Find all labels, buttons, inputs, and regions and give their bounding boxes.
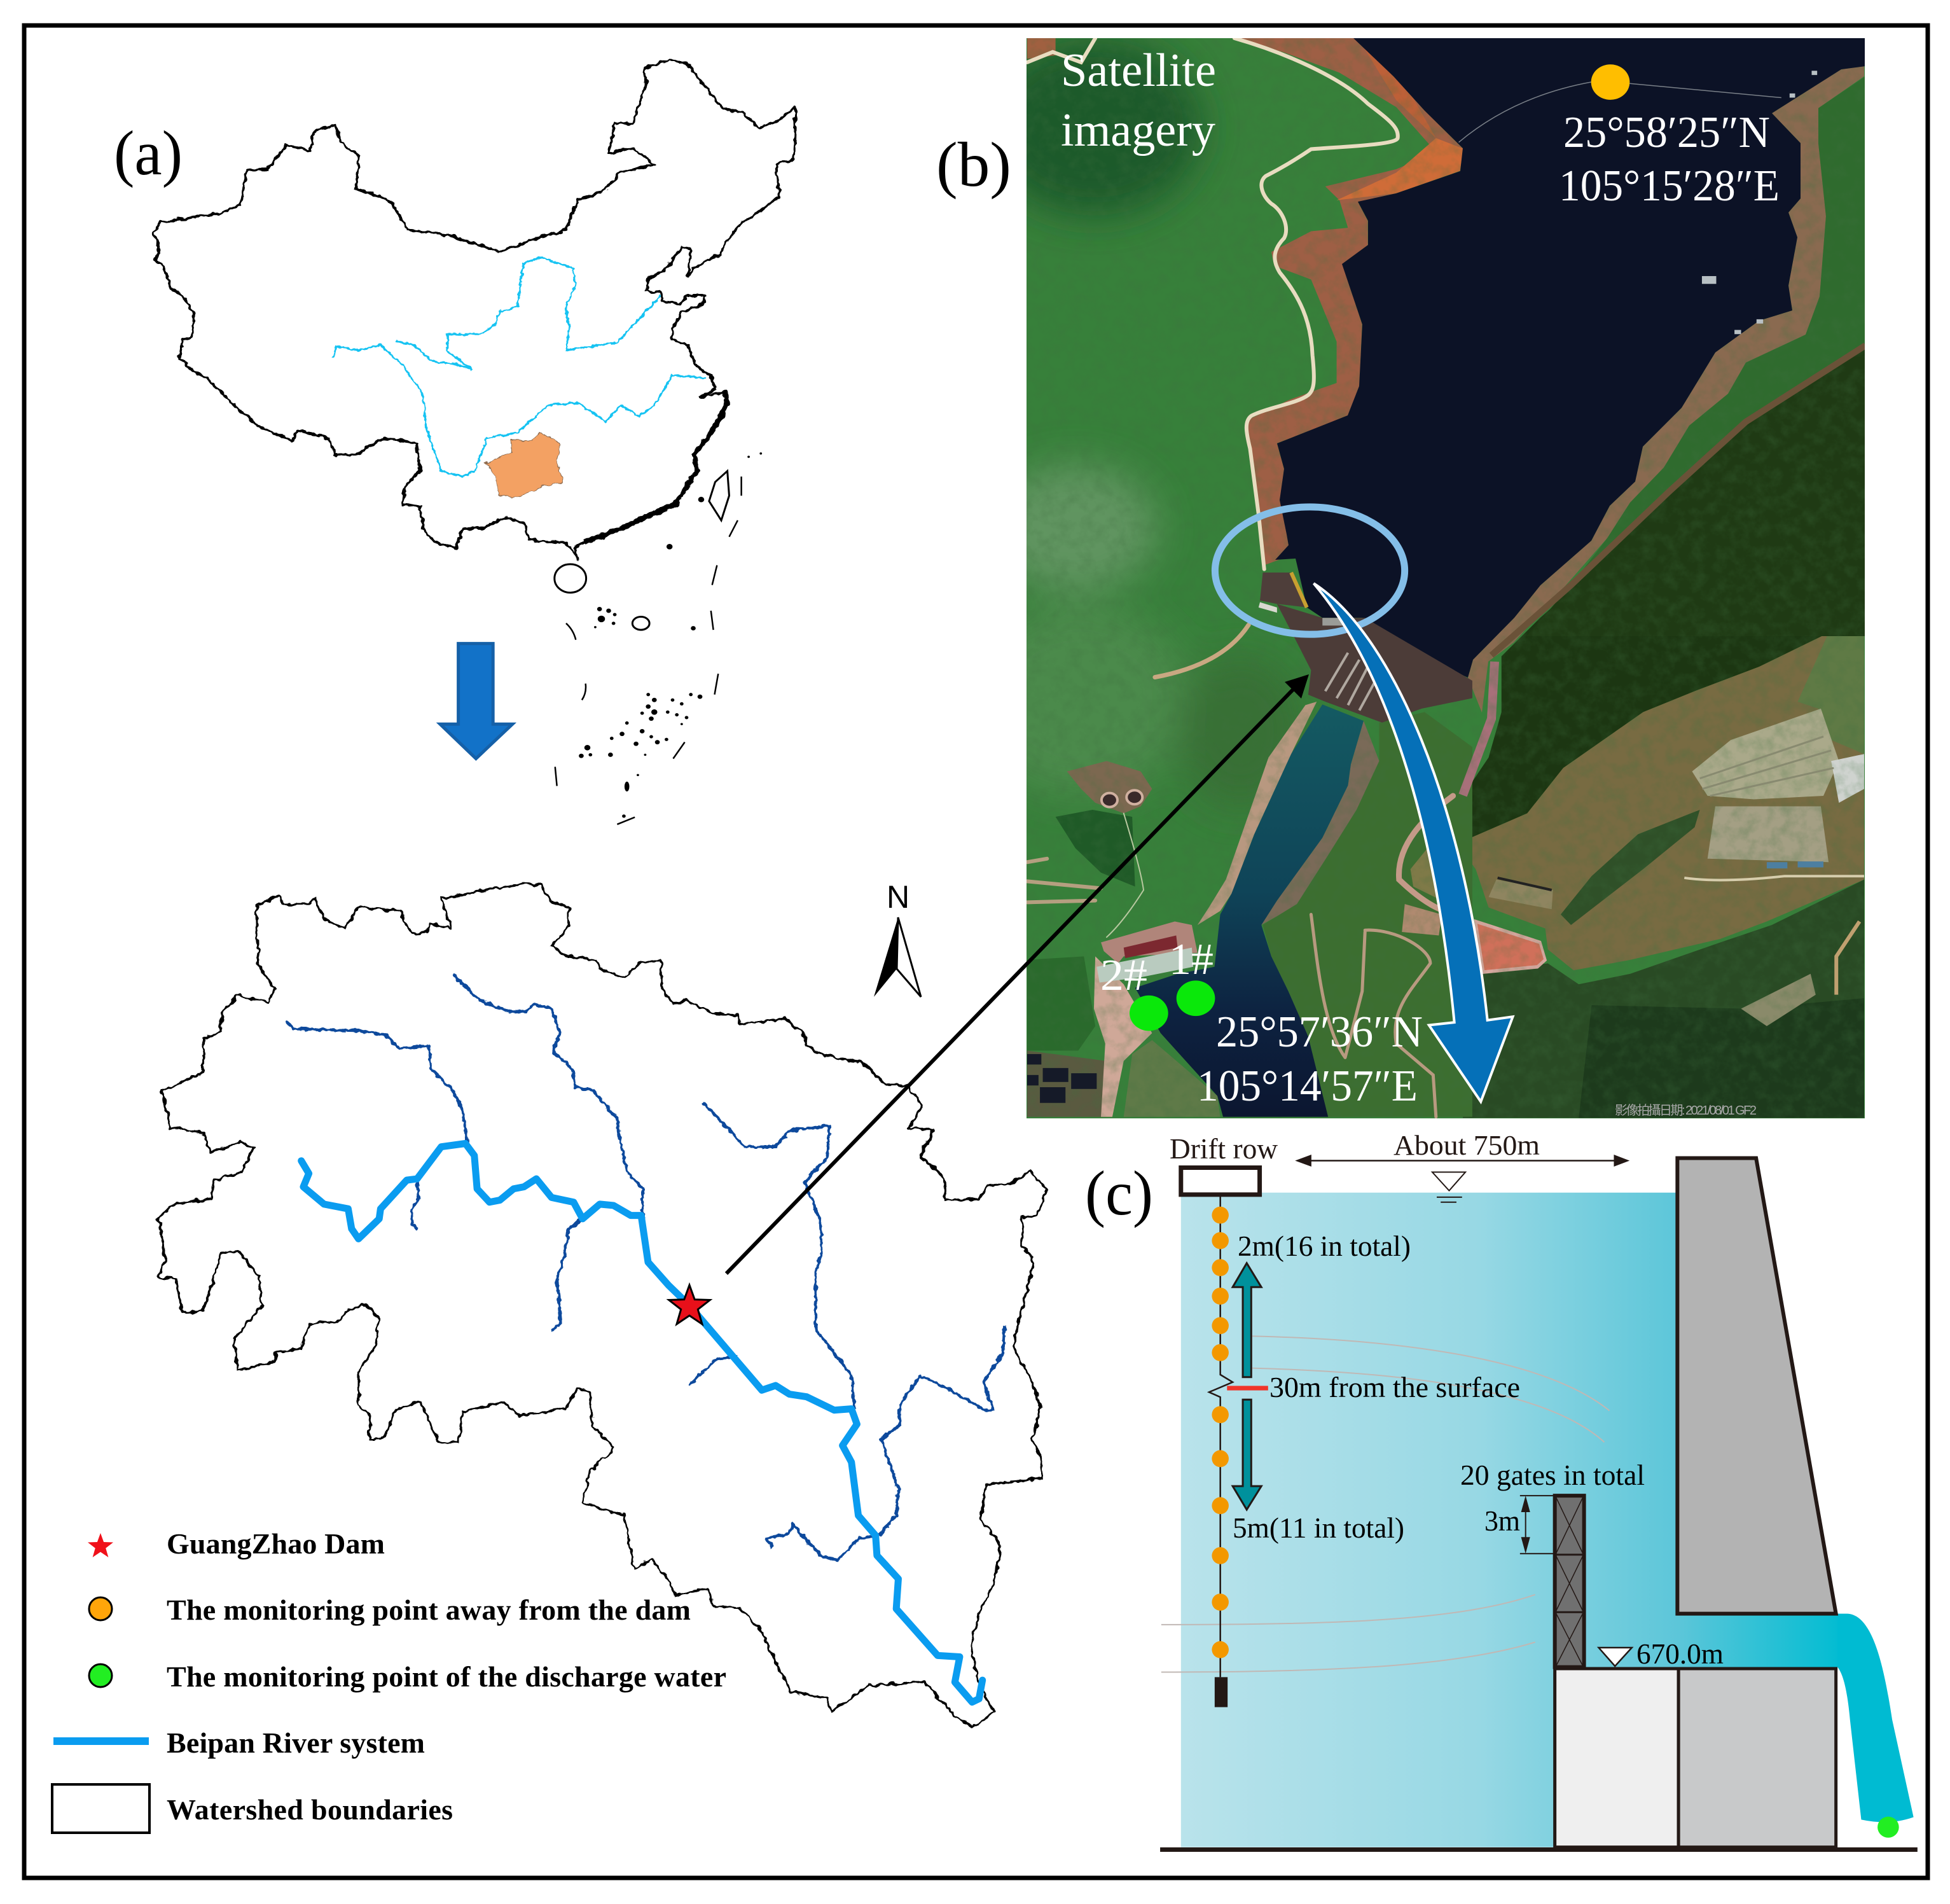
reservoir water — [1181, 1193, 1839, 1847]
side roads — [1027, 625, 1453, 1117]
upward spacing arrow — [1233, 1263, 1261, 1377]
middle terrain — [1027, 702, 1472, 1117]
east access road — [1836, 921, 1860, 995]
tan hillside — [1463, 618, 1864, 970]
water surface symbol — [1432, 1172, 1465, 1202]
powerhouse wall — [1101, 921, 1198, 963]
tank pad — [1067, 761, 1152, 813]
GuangZhao Dam star — [669, 1285, 710, 1324]
intake yard — [1260, 573, 1308, 608]
label (c): (c) — [1085, 1158, 1153, 1228]
thermal stratification lines — [1161, 1336, 1609, 1672]
3m dimension — [1520, 1496, 1555, 1553]
satellite labels: 25°57′36″N — [1216, 1008, 1423, 1057]
drift row float — [1181, 1167, 1260, 1195]
tank holes — [1102, 790, 1142, 807]
quarry lower pit — [1708, 806, 1829, 862]
shed shadow — [1498, 878, 1552, 890]
panel a: China map — [153, 59, 796, 824]
downstream river — [1135, 704, 1364, 1117]
legend: discharge monitoring point — [89, 1664, 112, 1687]
pink spoil area — [1476, 921, 1545, 972]
satellite labels: 1# — [1169, 935, 1214, 984]
darker lower forest — [1579, 998, 1864, 1118]
inner green field — [1411, 824, 1456, 908]
discharge monitoring point 1# — [1177, 980, 1215, 1016]
southeast forest — [1463, 880, 1864, 1118]
mooring weight — [1215, 1677, 1227, 1707]
satellite labels: Satellite — [1061, 45, 1216, 97]
tailwater level symbol — [1599, 1648, 1632, 1666]
intake base — [1555, 1669, 1678, 1847]
lake — [1275, 38, 1865, 678]
northwest corner bare ground — [1027, 38, 1056, 59]
dam highlight ellipse — [1215, 507, 1405, 634]
powerhouse red roof — [1124, 935, 1178, 958]
discharge monitoring point — [1877, 1817, 1899, 1838]
north arrow: N — [887, 879, 909, 915]
Yangtze River — [333, 345, 706, 476]
leader arrow from star to dam — [726, 674, 1309, 1274]
Guizhou province — [485, 431, 563, 497]
discharge monitoring point 2# — [1130, 996, 1168, 1031]
30m marker — [1227, 1386, 1268, 1391]
panel c text labels — [1170, 1130, 1724, 1670]
legend — [52, 1527, 726, 1833]
panel c text labels: 3m — [1484, 1505, 1520, 1537]
upper ridge — [1362, 45, 1436, 138]
pad — [1259, 602, 1277, 613]
orange headland — [1337, 138, 1463, 200]
boom line — [1459, 82, 1781, 142]
southeast terrain — [1463, 573, 1864, 1118]
pink east road — [1463, 662, 1495, 795]
legend: GuangZhao Dam — [167, 1527, 385, 1560]
spillway chutes — [1325, 653, 1380, 711]
dam crest — [1277, 604, 1472, 723]
powerhouse pale roof — [1096, 948, 1193, 982]
tonal patches on west slope — [1027, 38, 1303, 805]
hillside road — [1027, 38, 1398, 569]
legend: watershed — [52, 1784, 149, 1833]
satellite labels: 2# — [1100, 951, 1147, 1000]
north arrow — [874, 879, 921, 997]
panel a: Beipan River watershed map — [158, 884, 1047, 1727]
terraces — [1741, 974, 1816, 1026]
satellite labels: imagery — [1061, 104, 1215, 156]
legend: dam — [88, 1533, 113, 1557]
powerhouse yard — [1094, 956, 1152, 1117]
legend: Watershed boundaries — [167, 1793, 453, 1826]
east shore band — [1468, 66, 1864, 712]
blue sheds — [1767, 861, 1823, 868]
southeast coast — [584, 392, 728, 542]
east road — [1491, 345, 1865, 655]
dam and downstream features — [1027, 573, 1472, 1117]
ponds area — [1027, 1050, 1107, 1117]
small sheds — [1488, 880, 1553, 909]
satellite labels: 25°58′25″N — [1563, 108, 1770, 157]
monitoring point far from dam — [1591, 64, 1629, 100]
dam body — [1677, 1158, 1836, 1614]
panel c text labels: 2m(16 in total) — [1238, 1230, 1411, 1262]
pond cells — [1027, 1054, 1096, 1103]
tributaries — [286, 974, 1004, 1560]
west shore — [1027, 38, 1463, 566]
islands and maritime dashes — [555, 452, 762, 824]
legend: The monitoring point of the discharge water — [167, 1660, 726, 1693]
dark strip in hillside — [1561, 810, 1700, 925]
legend: far monitoring point — [89, 1597, 112, 1620]
gate tower — [1555, 1496, 1584, 1667]
quarry bench lines — [1700, 737, 1834, 796]
panel c text labels: 20 gates in total — [1460, 1459, 1645, 1491]
curved flow arrow — [1314, 583, 1513, 1102]
legend: river — [53, 1737, 149, 1745]
mooring line — [1209, 1195, 1233, 1677]
south green patch — [1124, 1040, 1220, 1117]
quarry road — [1684, 876, 1864, 880]
left forest — [1027, 956, 1095, 1050]
label (b): (b) — [936, 129, 1011, 200]
dark forest — [1472, 609, 1822, 837]
legend: The monitoring point away from the dam — [167, 1594, 691, 1626]
satellite labels — [1061, 45, 1780, 1111]
imagery date stamp: 影像拍攝日期: 2021/08/01 GF2 — [1615, 1103, 1757, 1118]
east river bank — [1261, 721, 1380, 925]
panel b: satellite imagery — [973, 38, 1865, 1118]
arrow: China to watershed — [440, 644, 513, 758]
panel c text labels: Drift row — [1170, 1133, 1278, 1165]
panel c text labels: 5m(11 in total) — [1233, 1512, 1404, 1544]
quarry details — [1498, 737, 1864, 995]
monitoring points on line — [1212, 1207, 1229, 1658]
white walkway — [1322, 618, 1348, 625]
satellite labels: 105°15′28″E — [1559, 162, 1780, 211]
ground line — [1160, 1847, 1918, 1852]
China outline — [153, 59, 796, 559]
east shore forest strip — [1571, 76, 1865, 585]
label (a): (a) — [114, 118, 183, 188]
gate gantry — [1291, 573, 1307, 608]
panel c text labels: 30m from the surface — [1269, 1372, 1520, 1403]
boats — [1702, 71, 1817, 334]
vegetation texture — [1027, 38, 1865, 1118]
powerhouse base — [1678, 1669, 1836, 1847]
downward spacing arrow — [1233, 1400, 1261, 1510]
panel c text labels: About 750m — [1393, 1130, 1540, 1161]
woodland — [1056, 810, 1135, 887]
Yellow River — [396, 258, 660, 370]
satellite labels: 105°14′57″E — [1197, 1062, 1418, 1111]
discharge jet — [1837, 1614, 1914, 1822]
legend: Beipan River system — [167, 1727, 425, 1759]
watershed boundary — [158, 884, 1047, 1727]
panel c text labels: 670.0m — [1636, 1638, 1724, 1670]
panel c: dam cross section — [1160, 1155, 1918, 1850]
hillside base — [1027, 38, 1865, 1118]
quarry terraces — [1692, 709, 1839, 800]
Beipan River main stem — [301, 1143, 983, 1702]
forest below the east road — [1526, 345, 1865, 636]
quarry pale spoil — [1831, 754, 1864, 803]
tan clearing — [1402, 904, 1442, 935]
750m dimension arrow — [1295, 1155, 1629, 1167]
central forest — [1263, 712, 1472, 1117]
west river bank — [1198, 702, 1317, 925]
greener upper hillside — [1797, 636, 1864, 754]
